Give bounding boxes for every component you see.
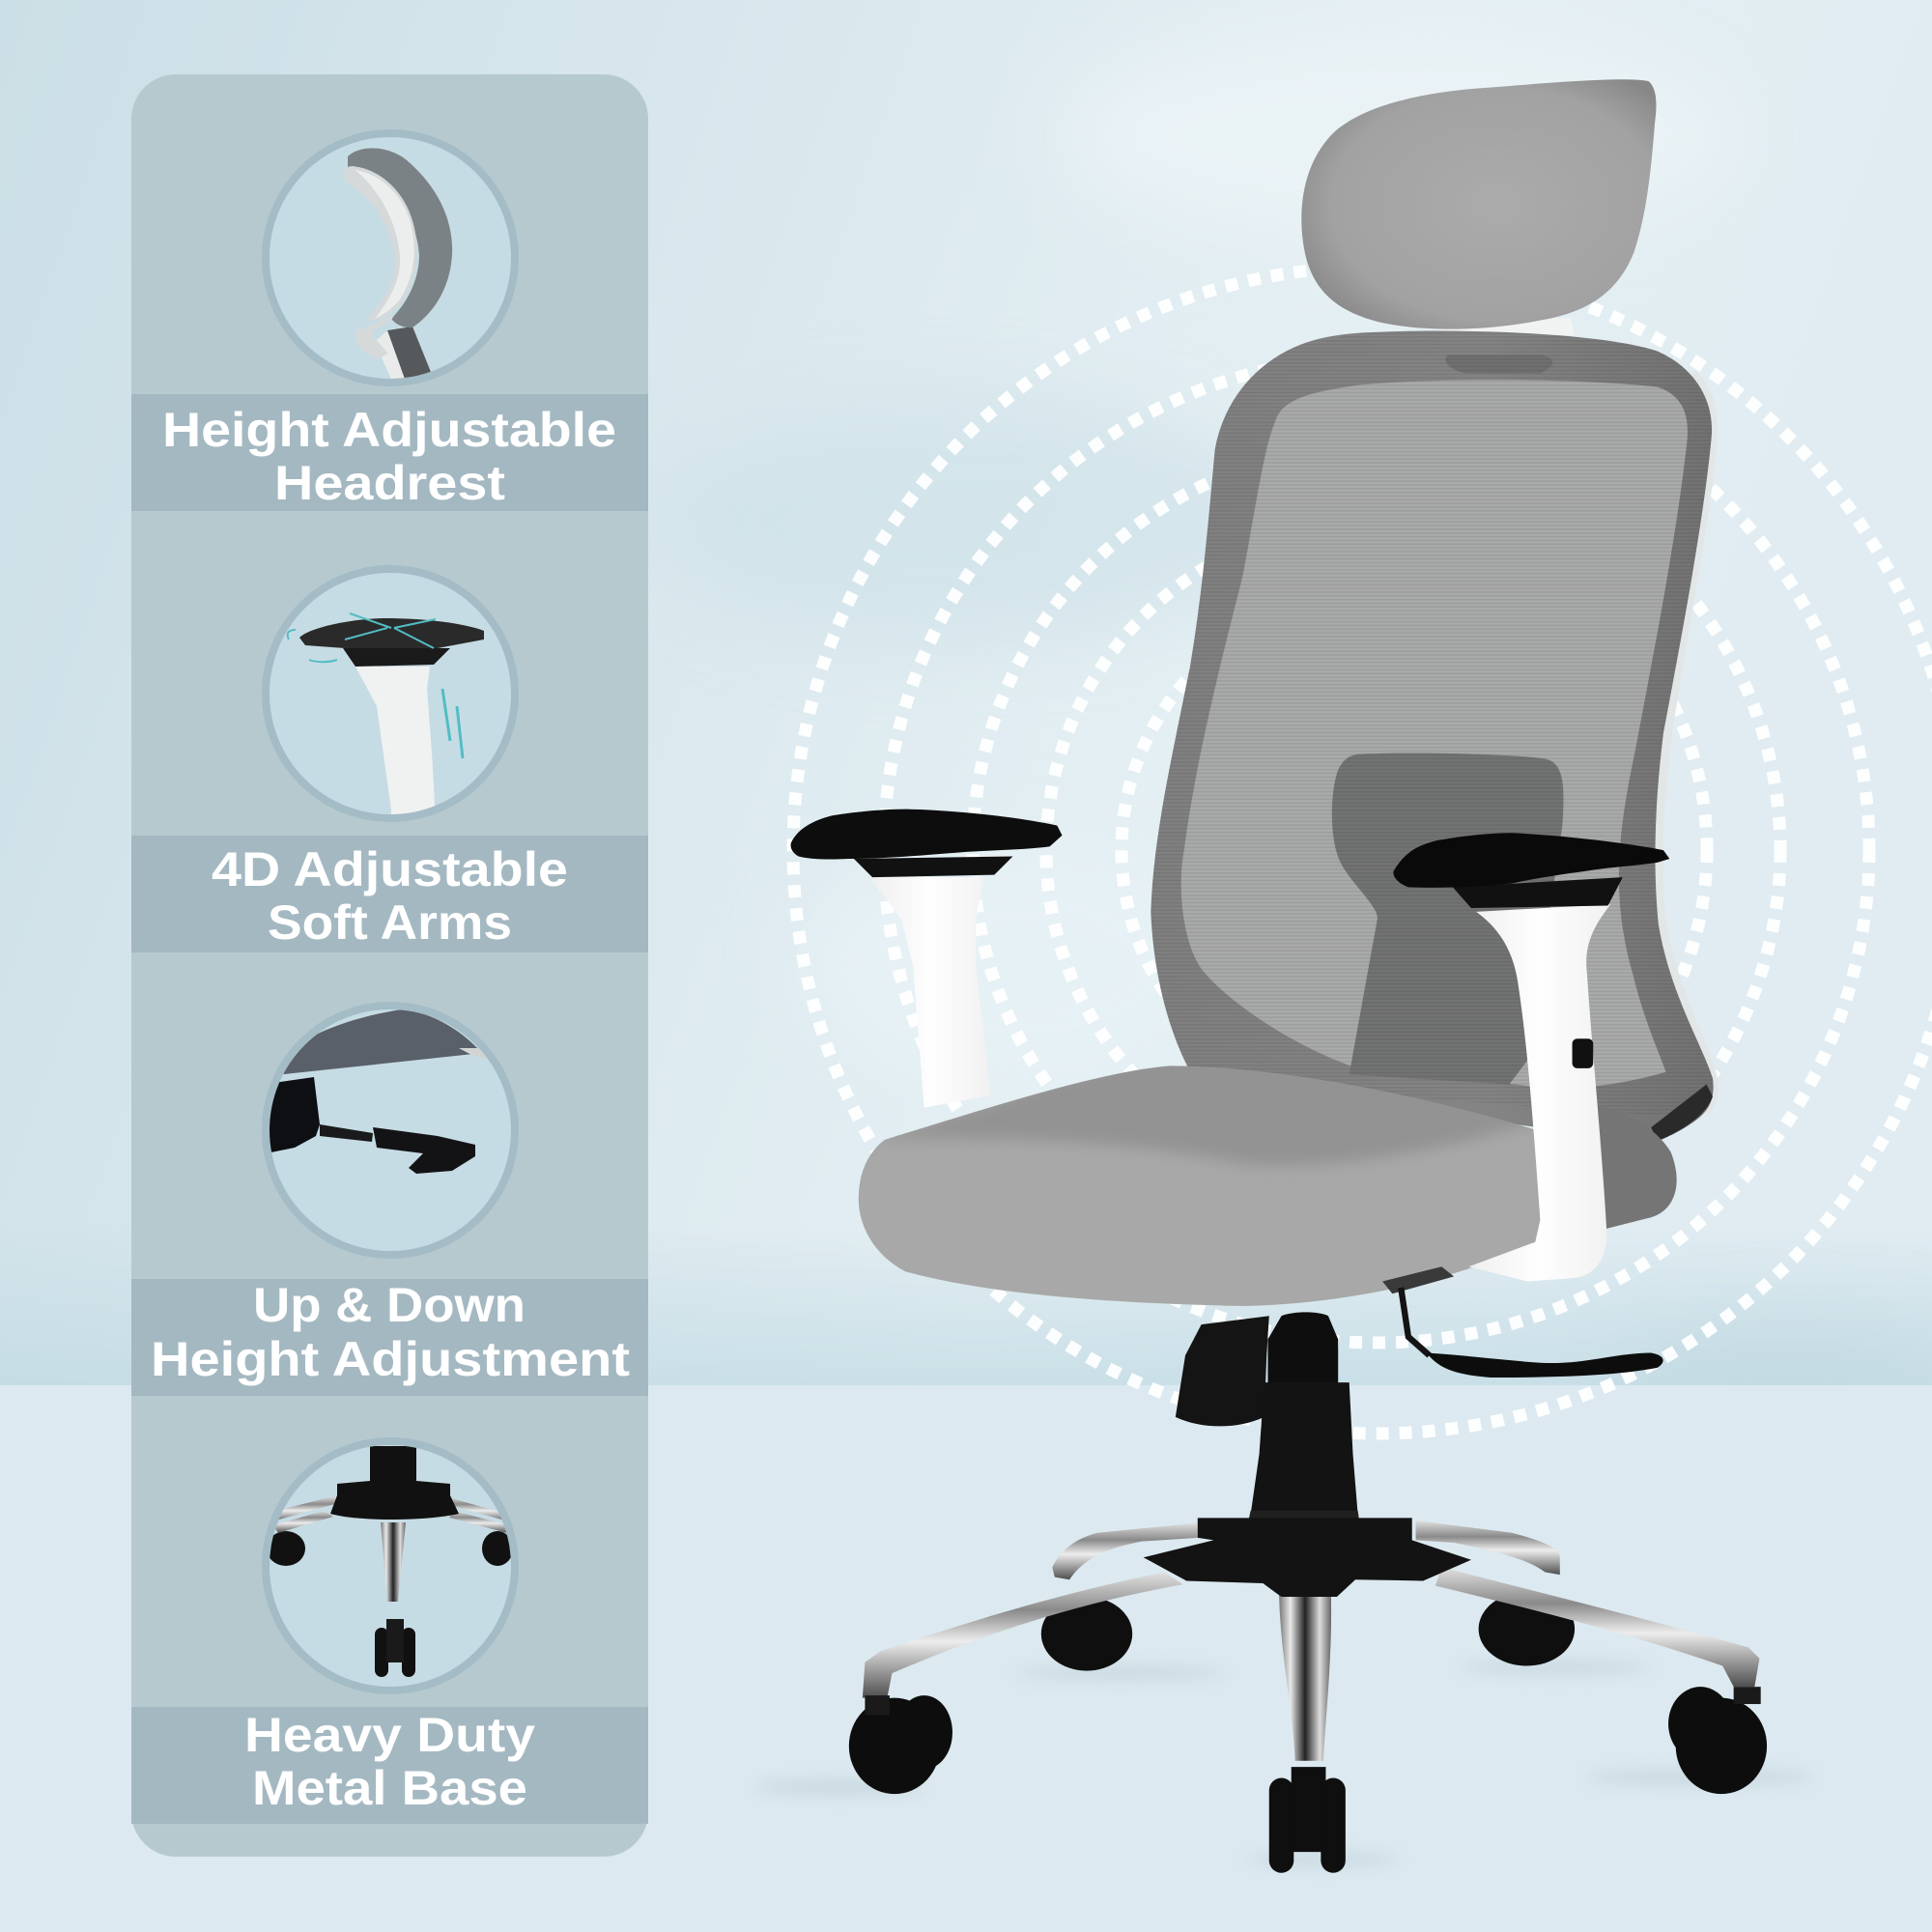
background: floor (0, 1385, 1932, 1932)
feature card: height lever (131, 1006, 648, 1396)
feature panel (131, 74, 648, 1857)
chair: white back frame edge (1638, 370, 1719, 1115)
chair: right armrest post (1468, 904, 1610, 1282)
chair: mesh backrest (1151, 331, 1714, 1144)
heading: Heavy Duty Metal Base: Heavy Duty (244, 1708, 535, 1762)
chair: back casters (1041, 1592, 1575, 1671)
chair: front-left caster (849, 1695, 952, 1794)
chair: right armrest mount (1453, 877, 1623, 908)
heading: 4D Adjustable Soft Arms: Soft Arms (268, 895, 512, 950)
chair: height lever (1401, 1288, 1663, 1378)
heading: Up & Down Height Adjustment (151, 1278, 630, 1386)
chair: mesh lower dark tip (1651, 1084, 1713, 1141)
heading: Height Adjustable Headrest: Height Adjustable (162, 403, 616, 457)
chair: headrest bracket (1439, 318, 1575, 335)
chair: left armrest pad (791, 810, 1062, 860)
icon: base close-up (261, 1441, 517, 1690)
chair: mesh texture (1151, 331, 1714, 1119)
chair: tilt knob (1176, 1316, 1269, 1426)
feature card: arms (131, 569, 648, 952)
chair: right armrest knob (1573, 1038, 1593, 1068)
floor shadows beneath the wheels (753, 1661, 1816, 1866)
chair: left armrest mount (854, 856, 1012, 877)
chair: rear seat cushion (1540, 1100, 1677, 1235)
chair: front-right caster (1668, 1687, 1767, 1794)
office chair (791, 79, 1767, 1873)
band: lever caption (131, 1279, 648, 1396)
background: soft blue wall (0, 0, 1932, 1410)
chair: under-seat label (1382, 1266, 1454, 1293)
chair: left armrest post (870, 877, 991, 1108)
chair: lumbar support pad (1332, 753, 1564, 1084)
icon: headrest close-up (266, 133, 515, 383)
chair: headrest (1301, 79, 1656, 329)
band: headrest caption (131, 394, 648, 511)
chair: gas cylinder (1247, 1312, 1360, 1533)
chair: seat cushion (859, 1054, 1555, 1306)
heading: Height Adjustable Headrest (162, 403, 616, 510)
chair: front-centre caster (1269, 1767, 1346, 1873)
heading: 4D Adjustable Soft Arms (212, 842, 568, 950)
band: arms caption (131, 836, 648, 952)
heading: Height Adjustable Headrest: Headrest (274, 456, 505, 510)
heading: Heavy Duty Metal Base: Metal Base (252, 1761, 527, 1815)
icon: 4D armrest close-up (266, 569, 515, 821)
chair: right armrest pad (1393, 833, 1669, 888)
chair: lighter inner mesh (1181, 380, 1688, 1088)
chair: black star hub (1144, 1518, 1471, 1597)
heading: 4D Adjustable Soft Arms: 4D Adjustable (212, 842, 568, 896)
heading: Up & Down Height Adjustment: Height Adjustment (151, 1332, 630, 1386)
band: base caption (131, 1707, 648, 1824)
chair: front base arms (chrome) (863, 1567, 1759, 1761)
feature card: headrest (131, 133, 648, 511)
icon: lever close-up (261, 1006, 515, 1255)
heading: Up & Down Height Adjustment: Up & Down (253, 1278, 526, 1332)
chair: back base arms (chrome) (1052, 1520, 1560, 1579)
feature card: metal base (131, 1441, 648, 1824)
heading: Heavy Duty Metal Base (244, 1708, 535, 1815)
dotted concentric rings behind the chair (793, 267, 1932, 1434)
chair: headrest mount shadow on mesh (1445, 355, 1552, 373)
